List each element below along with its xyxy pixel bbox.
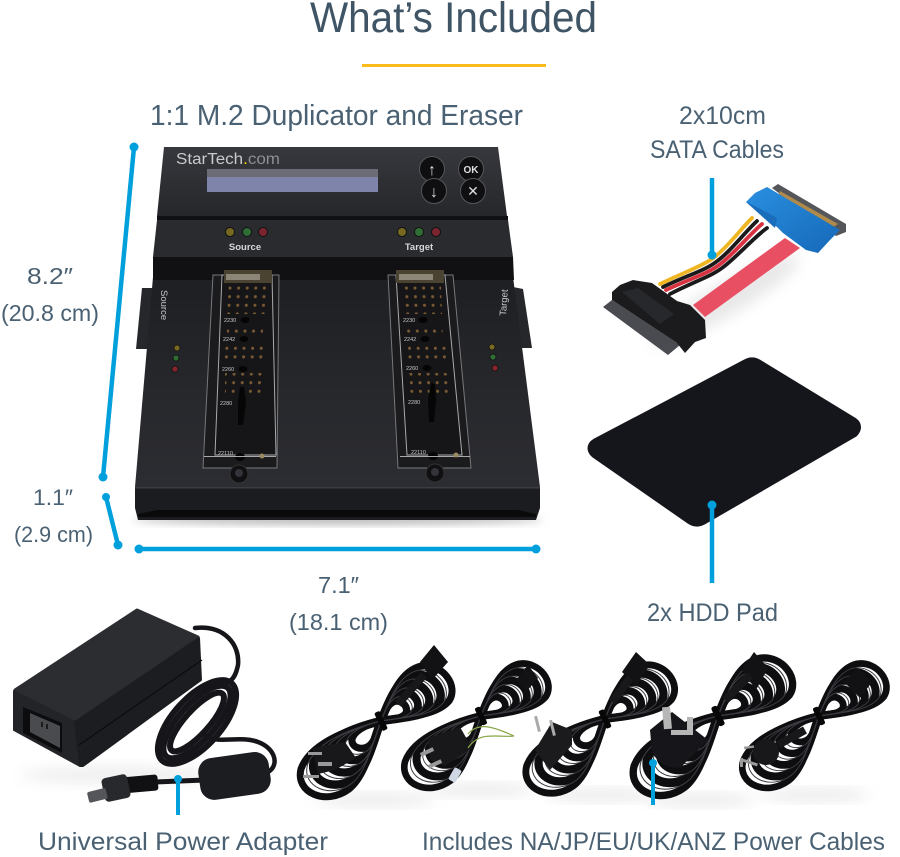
M.2 slot: source: 2260 — [222, 367, 234, 373]
flat red data cable — [693, 238, 800, 317]
heading: duplicator: 1:1 M.2 Duplicator and Eraser — [150, 100, 523, 132]
M.2 slot: source: 2230 — [224, 318, 236, 324]
dimension arrow: height — [98, 142, 138, 482]
DC plug — [87, 774, 159, 803]
M.2 slot: source: 22110 — [218, 451, 233, 457]
target LEDs — [398, 228, 440, 236]
heading: SATA cables: SATA Cables — [650, 136, 784, 164]
dimension label: depth: (2.9 cm) — [14, 522, 93, 547]
cable: EU — [526, 652, 675, 800]
middle status panel — [153, 220, 513, 257]
label: Target: Target — [405, 242, 434, 253]
side connector tabs — [136, 287, 532, 349]
button: cancel: ✕ — [467, 183, 479, 199]
rotated label: Source: Source — [158, 290, 169, 320]
dimension arrow: width — [134, 544, 540, 554]
cable: NA — [300, 645, 452, 805]
button: up — [420, 156, 444, 182]
dimension arrow: depth — [102, 493, 122, 550]
brand name: StarTech .com — [176, 151, 280, 168]
source LEDs — [226, 228, 268, 236]
power cables — [300, 645, 886, 805]
power adapter — [14, 610, 275, 803]
dimension label: depth — [14, 485, 93, 547]
label: HDD pad: 2x HDD Pad — [647, 599, 778, 627]
power wires — [660, 218, 767, 294]
side LEDs left — [172, 345, 180, 372]
dimension label: width: 7.1″ — [318, 572, 359, 598]
button: cancel — [460, 178, 486, 204]
overhang shadow — [153, 257, 514, 280]
dimension label: height: (20.8 cm) — [1, 300, 99, 326]
cable: JP — [404, 663, 548, 795]
dimension label: width: (18.1 cm) — [289, 609, 388, 635]
button: up: ↑ — [428, 162, 436, 179]
button: OK: OK — [464, 165, 479, 176]
base top face — [135, 277, 540, 487]
label: Source: Source — [229, 242, 261, 253]
cable: UK — [633, 652, 793, 805]
callout line: SATA cables — [708, 178, 716, 260]
button: down: ↓ — [430, 184, 438, 201]
dimension label: depth: 1.1″ — [33, 485, 73, 510]
heading: SATA cables: 2x10cm — [679, 102, 766, 130]
label: power adapter: Universal Power Adapter — [38, 828, 328, 856]
M.2 slot: source: 2242 — [223, 337, 235, 343]
adapter cords — [144, 628, 275, 782]
M.2 slot: target: 2230 — [403, 318, 415, 324]
dimension label: height: 8.2″ — [27, 263, 73, 289]
callout line: HDD pad — [708, 500, 716, 583]
M.2 slot: target: 2242 — [404, 337, 416, 343]
SATA cable assembly — [603, 184, 846, 356]
heading: SATA cables — [650, 102, 784, 164]
front face — [135, 487, 540, 520]
callout line: power cables — [649, 759, 657, 805]
black connector — [603, 280, 706, 355]
ferrite bead — [196, 750, 273, 802]
M.2 slot: target: 2260 — [406, 366, 418, 372]
side LEDs right — [489, 344, 498, 371]
dimension label: width — [289, 572, 388, 635]
button: OK — [458, 156, 484, 182]
title underline — [362, 64, 546, 67]
LCD screen — [207, 169, 378, 192]
AC socket — [23, 707, 62, 753]
HDD pad — [594, 364, 854, 520]
callout line: power adapter — [174, 775, 182, 815]
button: down — [422, 178, 446, 204]
top control panel — [157, 147, 507, 216]
M.2 slot: target: 22110 — [411, 450, 426, 456]
cable: ANZ — [740, 663, 886, 800]
M.2 slot: target — [388, 270, 471, 482]
M.2 slot: source — [203, 270, 279, 483]
M.2 slot: source: 2280 — [220, 401, 232, 407]
rotated label: Target: Target — [498, 289, 511, 316]
adapter body — [15, 610, 198, 720]
M.2 slot: target: 2280 — [408, 400, 420, 406]
blue connector — [746, 184, 846, 253]
label: power cables: Includes NA/JP/EU/UK/ANZ Power Cables — [422, 828, 885, 856]
device: M.2 duplicator — [133, 147, 543, 525]
dimension label: height — [1, 263, 99, 326]
